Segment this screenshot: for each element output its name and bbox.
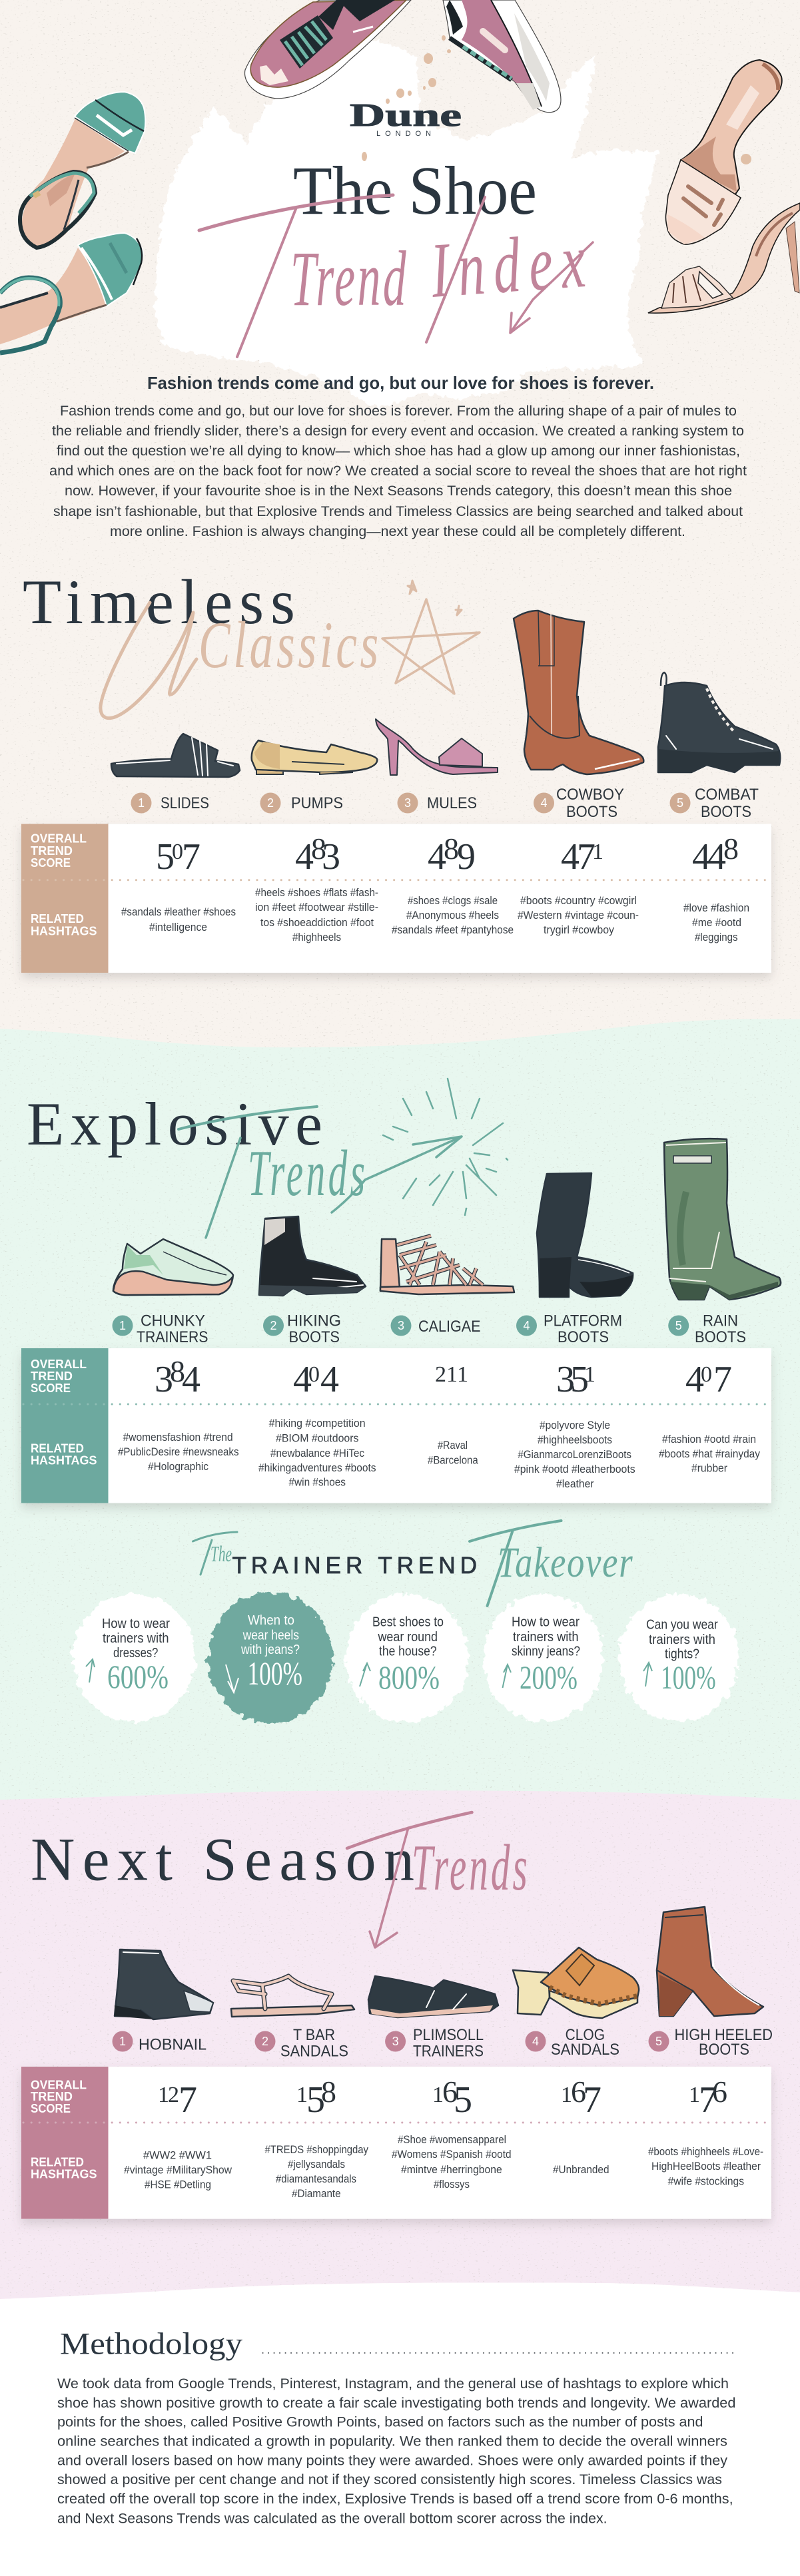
background: white footer <box>0 2283 800 2576</box>
hashtags: plimsoll trainers: #Shoe #womensapparel <box>398 2133 506 2146</box>
hashtags: rain boots: #fashion #ootd #rain <box>662 1433 756 1445</box>
hashtags: t bar sandals: #Diamante <box>292 2187 341 2200</box>
score: clog sandals 167: 7 <box>583 2079 601 2121</box>
script heading: Trends with down arrow: Trends <box>412 1832 528 1904</box>
score: slides 507: 5 <box>156 836 175 878</box>
methodology paragraph: showed a positive per cent change and not if they scored consistently high scores. Timeless Classics was <box>57 2472 722 2487</box>
hashtags: mules: #shoes #clogs #sale <box>408 894 498 907</box>
hashtags: rain boots <box>659 1433 760 1475</box>
numbered shoe labels <box>131 786 759 821</box>
numbered shoe labels: CALIGAE <box>418 1318 481 1336</box>
shoe: rain boots <box>664 1139 781 1300</box>
numbered shoe labels: COMBAT <box>695 786 759 804</box>
hashtags: combat boots: #leggings <box>695 931 738 943</box>
score: slides 507: 0 <box>172 840 183 864</box>
hashtags: pumps <box>255 886 378 943</box>
numbered shoe labels <box>112 2026 773 2060</box>
numbered shoe labels: 4 <box>532 2035 539 2048</box>
header brush splash <box>155 39 658 407</box>
hashtags: combat boots: #me #ootd <box>692 916 741 929</box>
numbered shoe labels: 1 <box>119 1319 126 1332</box>
title script: Trend Index: Trend <box>290 235 406 322</box>
circle: heels with jeans 100%: with jeans? <box>240 1643 300 1657</box>
shoe: caligae sandals <box>380 1236 514 1294</box>
heading: Trainer Trend Takeover: TRAINER TREND <box>232 1553 477 1579</box>
shoe: platform boots <box>537 1173 633 1297</box>
circle: dresses 600%: dresses? <box>113 1646 158 1661</box>
numbered shoe labels: 1 <box>119 2035 126 2048</box>
methodology paragraph: and Next Seasons Trends was calculated as the overall bottom scorer across the index. <box>57 2511 607 2526</box>
numbered shoe labels: BOOTS <box>701 803 751 821</box>
score: chunky trainers 384: 3 <box>155 1359 173 1400</box>
table: Explosive Trends scores: OVERALL <box>31 1357 87 1371</box>
hashtags: hobnail: #WW2 #WW1 <box>143 2149 212 2161</box>
hashtags: platform boots: #pink #ootd #leatherboots <box>514 1463 635 1475</box>
shoe: plimsoll trainers <box>368 1976 498 2017</box>
numbered shoe labels: 1 <box>138 796 145 810</box>
hashtags: combat boots: #love #fashion <box>683 902 749 914</box>
numbered shoe labels: RAIN <box>703 1312 738 1330</box>
score: pumps 483: 4 <box>295 836 314 878</box>
methodology paragraph: created off the overall top score in the index, Explosive Trends is based off a trend score from 0-6 months, <box>57 2491 733 2507</box>
score: platform boots 351: 1 <box>584 1362 596 1387</box>
hashtags: pumps: #heels #shoes #flats #fash- <box>255 886 378 899</box>
hashtags: t bar sandals: #diamantesandals <box>276 2173 356 2185</box>
score: pumps 483: 3 <box>322 836 340 878</box>
hashtags: plimsoll trainers: #mintve #herringbone <box>401 2163 502 2176</box>
numbered shoe labels: 4 <box>523 1319 530 1332</box>
heading: Methodology: Methodology <box>60 2326 243 2361</box>
script heading: Trends with burst arrow: Trends <box>248 1137 365 1210</box>
circle: heels with jeans 100%: When to <box>248 1613 294 1628</box>
heading: Trainer Trend Takeover: The <box>210 1542 232 1567</box>
hashtags: chunky trainers: #womensfashion #trend <box>123 1431 233 1443</box>
score: high heeled boots 176: 7 <box>699 2079 717 2121</box>
hashtags: platform boots: #highheelsboots <box>538 1433 612 1446</box>
numbered shoe labels: 5 <box>677 796 683 810</box>
numbered shoe labels: BOOTS <box>289 1328 340 1346</box>
hashtags: caligae: #Barcelona <box>428 1454 478 1467</box>
hashtags: hiking boots: #hikingadventures #boots <box>258 1461 376 1474</box>
score: chunky trainers 384: 8 <box>170 1354 185 1388</box>
hashtags: clog sandals: #Unbranded <box>553 2163 609 2176</box>
hashtags: mules: #Anonymous #heels <box>406 909 499 921</box>
table: Next Season Trends scores: RELATED <box>31 2155 84 2169</box>
table: Explosive Trends scores: TREND <box>31 1369 73 1383</box>
circle: tights 100%: trainers with <box>649 1633 715 1647</box>
table: Timeless Classics scores: HASHTAGS <box>31 923 97 937</box>
score: chunky trainers 384: 4 <box>182 1359 200 1400</box>
intro paragraph: the reliable and friendly slider, there’s a design for every event and occasion. We created a ranking system to <box>52 423 744 439</box>
numbered shoe labels: 3 <box>392 2035 399 2048</box>
hashtags: hobnail: #HSE #Detling <box>145 2179 211 2191</box>
table: Next Season Trends scores: SCORE <box>31 2101 71 2115</box>
score: hiking boots 404: 0 <box>308 1362 320 1387</box>
table: Timeless Classics scores: SCORE <box>31 856 71 870</box>
numbered shoe labels: SLIDES <box>161 794 209 812</box>
hashtags: high heeled boots: #wife #stockings <box>668 2175 744 2188</box>
hashtags: plimsoll trainers: #Womens #Spanish #ootd <box>392 2148 512 2161</box>
script heading: Trends with burst arrow <box>179 1079 508 1238</box>
hashtags: hiking boots: #hiking #competition <box>269 1417 366 1429</box>
heading: Trainer Trend Takeover <box>193 1521 633 1606</box>
score: caligae 211: 1 <box>446 1362 458 1387</box>
numbered shoe labels: 5 <box>655 2035 662 2048</box>
title: The Shoe: The Shoe <box>293 152 537 229</box>
circle: dresses 600% <box>73 1594 195 1722</box>
intro heading: Fashion trends come and go, but our love for shoes is forever. <box>147 373 654 393</box>
illustration: rose mule <box>665 60 782 244</box>
table: Timeless Classics scores: OVERALL <box>31 831 87 846</box>
score: plimsoll trainers 165: 6 <box>442 2075 458 2109</box>
hashtags: cowboy boots <box>518 894 639 936</box>
intro paragraph: and which ones are on the back foot for now? We created a social score to reveal the shoes that are hot right <box>49 463 747 479</box>
circle: round the house 800%: wear round <box>378 1630 438 1645</box>
circle: heels with jeans 100%: wear heels <box>242 1629 299 1643</box>
hashtags: hiking boots <box>258 1417 376 1489</box>
illustration: teal sandal, bottom <box>0 233 143 353</box>
hashtags: combat boots <box>683 902 749 943</box>
circle: skinny jeans 200%: skinny jeans? <box>512 1645 580 1659</box>
numbered shoe labels: BOOTS <box>699 2041 749 2059</box>
score: plimsoll trainers 165: 1 <box>432 2083 444 2107</box>
hashtags: pumps: tos #shoeaddiction #foot <box>260 916 374 929</box>
intro paragraph: shape isn’t fashionable, but that Explosive Trends and Timeless Classics are being searched and talked about <box>53 504 743 519</box>
table: Timeless Classics scores <box>21 824 771 973</box>
circle: round the house 800%: the house? <box>379 1645 437 1659</box>
circle: skinny jeans 200%: 200% <box>520 1659 578 1696</box>
score: mules 489: 8 <box>444 832 459 866</box>
hashtags: platform boots <box>514 1419 635 1490</box>
methodology paragraph: We took data from Google Trends, Pinterest, Instagram, and the general use of hashtags to explore which <box>57 2376 729 2392</box>
shoe: mules <box>376 719 498 775</box>
ink splashes <box>362 35 751 164</box>
hashtags: hiking boots: #newbalance #HiTec <box>270 1447 364 1459</box>
numbered shoe labels: COWBOY <box>556 786 624 804</box>
heading: Trainer Trend Takeover: Takeover <box>498 1538 633 1586</box>
score: combat boots 448: 4 <box>692 836 711 878</box>
score: hiking boots 404: 4 <box>293 1359 312 1400</box>
hashtags: hobnail: #vintage #MilitaryShow <box>124 2164 232 2177</box>
title script: Trend Index: Index <box>428 216 588 314</box>
hashtags: platform boots: #leather <box>556 1477 594 1490</box>
hashtags: chunky trainers: #Holographic <box>148 1460 208 1473</box>
circle: round the house 800%: 800% <box>378 1659 440 1696</box>
hashtags: hobnail <box>124 2149 232 2191</box>
circle: dresses 600%: trainers with <box>103 1631 169 1646</box>
hashtags: plimsoll trainers: #flossys <box>434 2178 470 2190</box>
methodology paragraph: and overall losers based on how many points they were awarded. Shoes were only awarded points if they <box>57 2453 728 2468</box>
hashtags: plimsoll trainers <box>392 2133 512 2190</box>
score: slides 507: 7 <box>182 836 200 878</box>
score: clog sandals 167: 6 <box>571 2075 586 2109</box>
hashtags: cowboy boots: #boots #country #cowgirl <box>520 894 637 907</box>
shoe: chunky trainers <box>113 1239 233 1295</box>
table: Explosive Trends scores: HASHTAGS <box>31 1453 97 1467</box>
circle: tights 100% <box>619 1594 739 1722</box>
hashtags: pumps: ion #feet #footwear #stille- <box>255 901 378 913</box>
section: Methodology <box>57 2326 735 2526</box>
score: platform boots 351: 3 <box>556 1359 575 1400</box>
hashtags: chunky trainers <box>118 1431 238 1473</box>
numbered shoe labels: 3 <box>398 1319 404 1332</box>
numbered shoe labels: PLATFORM <box>544 1312 622 1330</box>
illustration: pink trainer, left <box>245 0 411 99</box>
score: hobnail 127: 2 <box>168 2083 179 2107</box>
numbered shoe labels: TRAINERS <box>137 1328 208 1346</box>
title script: Trend Index <box>199 195 593 357</box>
score: t bar sandals 158: 5 <box>306 2079 325 2121</box>
table: Next Season Trends scores: OVERALL <box>31 2077 87 2092</box>
numbered shoe labels: BOOTS <box>566 803 617 821</box>
hashtags: pumps: #highheels <box>292 931 341 943</box>
intro paragraph: Fashion trends come and go, but our love for shoes is forever. From the alluring shape of a pair of mules to <box>60 403 737 419</box>
score: cowboy boots 471: 4 <box>561 836 580 878</box>
numbered shoe labels: 4 <box>540 796 548 810</box>
numbered shoe labels: CLOG <box>566 2026 605 2044</box>
score: combat boots 448: 4 <box>707 836 726 878</box>
hashtags: t bar sandals: #TREDS #shoppingday <box>265 2143 368 2156</box>
numbered shoe labels: 2 <box>262 2035 268 2048</box>
section: Explosive Trends <box>21 1079 781 1503</box>
shoe: cowboy boots <box>514 611 643 774</box>
table: Timeless Classics scores: RELATED <box>31 911 84 925</box>
circle: round the house 800%: Best shoes to <box>372 1615 444 1630</box>
numbered shoe labels: CHUNKY <box>141 1312 205 1330</box>
illustration: rose heeled sandal <box>648 203 800 313</box>
logo: Dune London: LONDON <box>376 130 431 138</box>
table: Explosive Trends scores: SCORE <box>31 1381 71 1395</box>
circle: dresses 600%: 600% <box>107 1658 169 1695</box>
circle: skinny jeans 200% <box>484 1594 603 1722</box>
numbered shoe labels: HIKING <box>287 1312 341 1330</box>
logo: Dune London: Dune <box>350 97 462 133</box>
shoe: t bar sandals <box>231 1976 354 2017</box>
hashtags: mules: #sandals #feet #pantyhose <box>392 923 514 936</box>
shoe: hiking boots <box>259 1216 366 1296</box>
score: hobnail 127: 7 <box>179 2079 197 2121</box>
numbered shoe labels: 3 <box>404 796 411 810</box>
numbered shoe labels: T BAR <box>293 2026 335 2044</box>
score: high heeled boots 176: 1 <box>689 2083 700 2107</box>
hashtags: mules <box>392 894 514 936</box>
methodology paragraph: points for the shoes, called Positive Growth Points, based on factors such as the number of posts and <box>57 2415 703 2430</box>
section: Timeless Classics <box>21 567 780 973</box>
background: pink paper section <box>0 1790 800 2299</box>
script heading: Trends with down arrow <box>347 1812 528 1947</box>
numbered shoe labels: SANDALS <box>280 2042 348 2060</box>
score: hiking boots 404: 4 <box>320 1359 339 1400</box>
shoe: slides <box>111 734 240 777</box>
score: hobnail 127: 1 <box>158 2083 169 2107</box>
numbered shoe labels: MULES <box>427 794 477 812</box>
numbered shoe labels: 2 <box>267 796 274 810</box>
illustration: pink trainer, right <box>443 0 561 113</box>
heading: Next Season: Next Season <box>31 1826 414 1894</box>
logo: Dune London <box>350 97 462 138</box>
circle: tights 100%: Can you wear <box>646 1618 718 1633</box>
table: Explosive Trends scores: RELATED <box>31 1441 84 1455</box>
score: cowboy boots 471: 7 <box>577 836 596 878</box>
score: rain boots 407: 4 <box>685 1359 704 1400</box>
score: caligae 211: 1 <box>457 1362 468 1387</box>
circle: tights 100%: tights? <box>665 1647 699 1662</box>
table: Timeless Classics scores: TREND <box>31 844 73 858</box>
score: plimsoll trainers 165: 5 <box>454 2079 472 2121</box>
hashtags: high heeled boots: #boots #highheels #Love- <box>648 2145 763 2158</box>
methodology paragraph: shoe has shown positive growth to create a fair scale investigating both trends and longevity. We awarded <box>57 2396 735 2411</box>
score: high heeled boots 176: 6 <box>712 2075 727 2109</box>
circle: dresses 600%: How to wear <box>102 1617 170 1631</box>
score: cowboy boots 471: 1 <box>592 840 603 864</box>
score: rain boots 407: 0 <box>701 1362 712 1387</box>
numbered shoe labels: PLIMSOLL <box>413 2026 484 2044</box>
numbered shoe labels: SANDALS <box>551 2041 619 2059</box>
numbered shoe labels: 2 <box>270 1319 277 1332</box>
section: The Trainer Trend Takeover <box>73 1521 739 1723</box>
hashtags: t bar sandals: #jellysandals <box>288 2158 345 2171</box>
shoe: pumps <box>252 740 377 774</box>
circle: heels with jeans 100% <box>208 1593 333 1723</box>
hashtags: slides: #intelligence <box>149 921 207 933</box>
hashtags: slides: #sandals #leather #shoes <box>121 905 236 918</box>
methodology paragraph <box>57 2376 735 2526</box>
intro paragraph: now. However, if your favourite shoe is in the Next Seasons Trends category, this doesn’t mean this shoe <box>65 483 732 499</box>
numbered shoe labels: TRAINERS <box>413 2042 484 2060</box>
shoe: high heeled boots <box>657 1907 763 2016</box>
table: Next Season Trends scores <box>21 2067 771 2219</box>
shoe: clog sandals <box>513 1947 639 2018</box>
numbered shoe labels: HOBNAIL <box>139 2036 206 2054</box>
shoe: combat boots <box>658 672 780 772</box>
score: clog sandals 167: 1 <box>561 2083 572 2107</box>
score: combat boots 448: 8 <box>723 832 739 866</box>
hashtags: cowboy boots: #Western #vintage #coun- <box>518 909 639 921</box>
script heading: Classics with star: Classics <box>199 609 378 682</box>
script heading: Classics with star <box>101 581 480 718</box>
numbered shoe labels: BOOTS <box>695 1328 746 1346</box>
score: mules 489: 4 <box>428 836 446 878</box>
methodology paragraph: online searches that indicated a growth in popularity. We then ranked them to decide the overall winners <box>57 2434 727 2449</box>
heading: Explosive: Explosive <box>27 1090 322 1158</box>
table: Explosive Trends scores <box>21 1348 771 1503</box>
hashtags: t bar sandals <box>265 2143 368 2200</box>
hashtags: rain boots: #rubber <box>691 1462 727 1475</box>
hashtags: hiking boots: #BIOM #outdoors <box>276 1431 358 1445</box>
circle: heels with jeans 100%: 100% <box>248 1655 302 1692</box>
hashtags: caligae: #Raval <box>438 1439 468 1451</box>
score: t bar sandals 158: 1 <box>296 2083 308 2107</box>
numbered shoe labels: 5 <box>675 1319 682 1332</box>
shoe: hobnail <box>115 1949 213 2019</box>
score: rain boots 407: 7 <box>713 1359 732 1400</box>
table: Next Season Trends scores: TREND <box>31 2089 73 2103</box>
score: pumps 483: 8 <box>311 832 326 866</box>
circle: round the house 800% <box>346 1594 468 1722</box>
hashtags: cowboy boots: trygirl #cowboy <box>544 923 614 936</box>
hashtags: high heeled boots <box>648 2145 763 2188</box>
score: platform boots 351: 5 <box>570 1359 589 1400</box>
hashtags: platform boots: #polyvore Style <box>540 1419 610 1431</box>
circle: skinny jeans 200%: How to wear <box>512 1615 580 1630</box>
score: caligae 211: 2 <box>435 1362 446 1387</box>
score: t bar sandals 158: 8 <box>321 2075 336 2109</box>
numbered shoe labels: BOOTS <box>558 1328 609 1346</box>
hashtags: high heeled boots: HighHeelBoots #leather <box>651 2160 761 2173</box>
numbered shoe labels: HIGH HEELED <box>674 2026 773 2044</box>
table: Next Season Trends scores: HASHTAGS <box>31 2167 97 2181</box>
hashtags: hiking boots: #win #shoes <box>289 1476 346 1489</box>
intro paragraph <box>49 403 747 539</box>
section: Next Season Trends <box>21 1812 773 2219</box>
hashtags: slides <box>121 905 236 933</box>
background: green paper section <box>0 1019 800 1811</box>
hashtags: chunky trainers: #PublicDesire #newsneaks <box>118 1445 238 1458</box>
circle: tights 100%: 100% <box>661 1659 716 1696</box>
numbered shoe labels: PUMPS <box>291 794 343 812</box>
intro paragraph: find out the question we’re all dying to know— which shoe has had a glow up among our inner fashionistas, <box>57 443 740 459</box>
intro paragraph: more online. Fashion is always changing—next year these could all be completely different. <box>110 524 685 539</box>
circle: skinny jeans 200%: trainers with <box>513 1630 579 1645</box>
hashtags: rain boots: #boots #hat #rainyday <box>659 1447 760 1460</box>
hashtags: caligae <box>428 1439 478 1467</box>
illustration: teal sandal, top <box>20 92 145 248</box>
numbered shoe labels <box>112 1312 746 1346</box>
heading: Timeless: Timeless <box>23 567 295 637</box>
score: mules 489: 9 <box>457 836 476 878</box>
background: cream paper section <box>0 0 800 1065</box>
hashtags: platform boots: #GianmarcoLorenziBoots <box>518 1448 631 1461</box>
